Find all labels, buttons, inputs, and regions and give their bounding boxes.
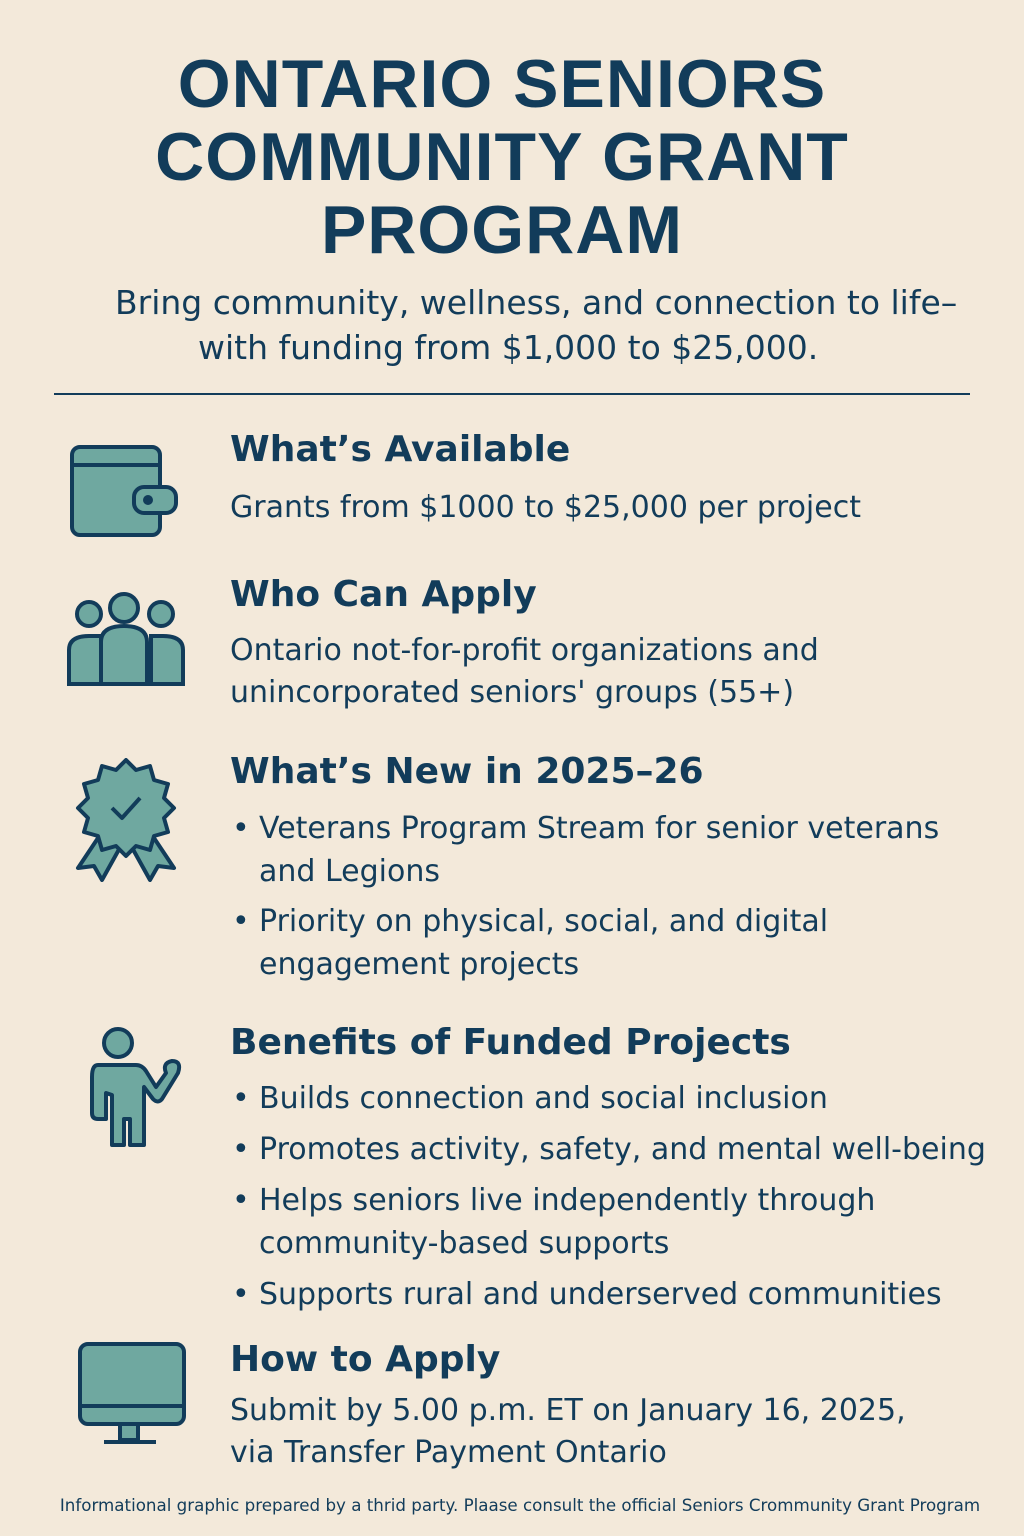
- section: what's new: [230, 751, 939, 982]
- bullets: •: [232, 1081, 250, 1116]
- section: benefits: Promotes activity, safety, and mental well-being: [259, 1132, 986, 1167]
- body: via Transfer Payment Ontario: [230, 1435, 667, 1470]
- heading: Who Can Apply: [230, 574, 537, 615]
- heading: What’s New in 2025–26: [230, 751, 704, 792]
- body: Submit by 5.00 p.m. ET on January 16, 2025,: [230, 1393, 906, 1428]
- body: Ontario not-for-profit organizations and: [230, 633, 819, 668]
- section: who can apply: [230, 574, 819, 710]
- bullets: •: [232, 811, 250, 846]
- section: benefits: Supports rural and underserved communities: [259, 1277, 942, 1312]
- title: PROGRAM: [321, 192, 683, 268]
- heading: How to Apply: [230, 1339, 500, 1380]
- subtitle: Bring community, wellness, and connection to life–: [115, 283, 957, 322]
- body: [230, 633, 819, 710]
- bullets: [232, 811, 939, 889]
- title: COMMUNITY GRANT: [155, 119, 849, 195]
- body: Grants from $1000 to $25,000 per project: [230, 490, 861, 525]
- bullets: Veterans Program Stream for senior veterans: [259, 811, 939, 846]
- title: ONTARIO SENIORS: [178, 46, 826, 122]
- subtitle: with funding from $1,000 to $25,000.: [198, 328, 818, 367]
- icon: badge: [76, 758, 176, 882]
- section: benefits: community-based supports: [259, 1226, 669, 1261]
- icon: monitor: [78, 1342, 186, 1444]
- footer: Informational graphic prepared by a thrid party. Plaase consult the official Seniors Crommunity Grant Program: [60, 1495, 980, 1515]
- section: benefits: [230, 1022, 986, 1312]
- heading: Benefits of Funded Projects: [230, 1022, 791, 1063]
- bullets: Builds connection and social inclusion: [259, 1081, 828, 1116]
- section: what's available: [230, 429, 861, 525]
- icon: person waving: [90, 1027, 182, 1147]
- icon: wallet: [70, 445, 178, 537]
- section: what's new: •: [232, 904, 250, 939]
- subtitle: [115, 283, 957, 367]
- section: benefits: Helps seniors live independently through: [259, 1183, 875, 1218]
- section: how to apply: [230, 1339, 906, 1470]
- icon: people: [67, 592, 185, 686]
- bullets: and Legions: [259, 854, 440, 889]
- body: unincorporated seniors' groups (55+): [230, 675, 794, 710]
- heading: What’s Available: [230, 429, 570, 470]
- section: benefits: •: [232, 1132, 250, 1167]
- title: [155, 46, 849, 268]
- section: what's new: engagement projects: [259, 947, 579, 982]
- section: benefits: •: [232, 1183, 250, 1218]
- body: [230, 1393, 906, 1470]
- section: what's new: Priority on physical, social, and digital: [259, 904, 828, 939]
- section: benefits: •: [232, 1277, 250, 1312]
